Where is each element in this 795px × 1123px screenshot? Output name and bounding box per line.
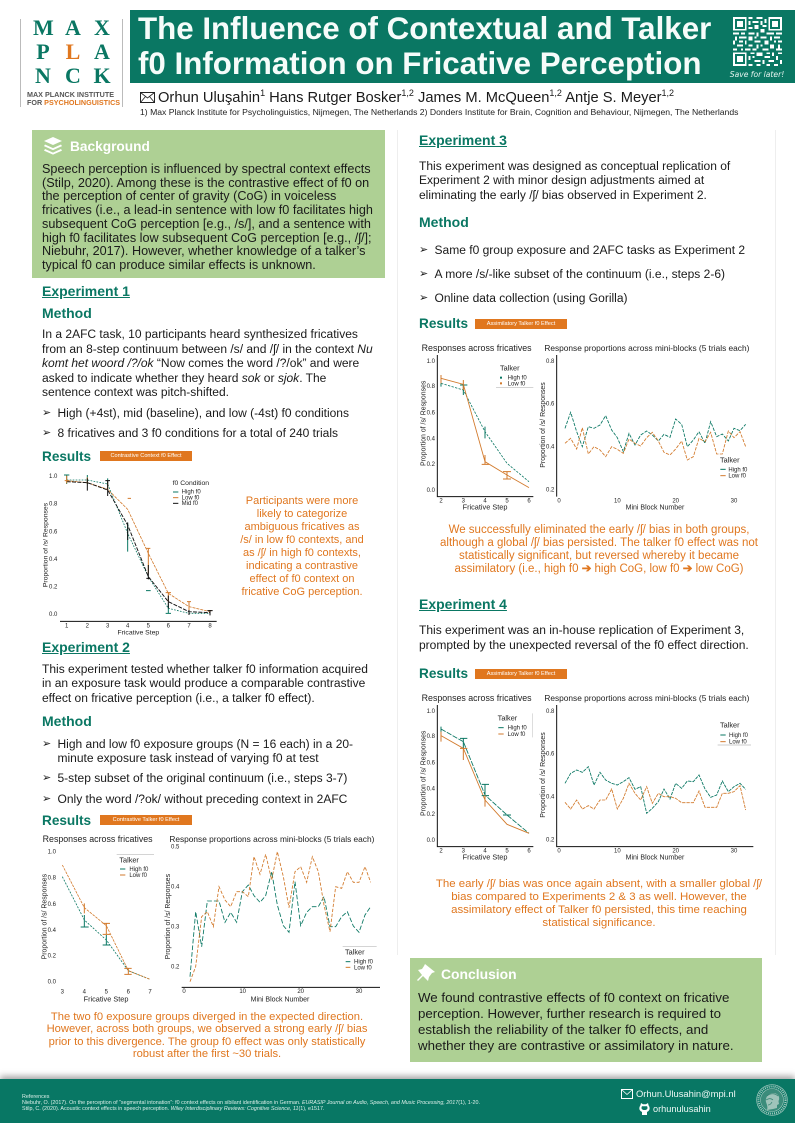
references: References xyxy=(22,1094,49,1100)
heading: results: Results xyxy=(42,813,91,828)
line charts: experiment 2: 7 xyxy=(148,990,152,996)
line charts: experiment 2: Responses across fricatives xyxy=(43,834,153,844)
line charts: experiment 4: 1.0 xyxy=(427,709,436,715)
line charts: experiment 2: Proportion of /s/ Responses xyxy=(42,873,49,959)
experiment 2 intro xyxy=(42,662,368,705)
line charts: experiment 2: 20 xyxy=(297,989,305,995)
results note: Participants were more xyxy=(246,494,358,506)
line charts: experiment 4: 0.4 xyxy=(546,795,555,801)
bullet list: High and low f0 exposure groups (N = 16 each) in a 20- xyxy=(58,736,353,750)
logo: Max Planck Institute for Psycholinguistics: C xyxy=(65,63,81,88)
line charts: experiment 4: High f0 xyxy=(508,726,527,732)
method text: In a 2AFC task, 10 participants heard synthesized fricatives xyxy=(42,327,358,341)
experiment 3 intro: eliminating the early /ʃ/ bias observed in Experiment 2. xyxy=(419,188,707,202)
line chart: experiment 1: 1 xyxy=(65,623,69,629)
conclusion text: perception. However, further research is required to xyxy=(418,1006,721,1021)
line charts: experiment 4: Response proportions across mini-blocks (5 trials each) xyxy=(544,693,750,703)
results note: statistically significant, but reversed whereby it became xyxy=(459,550,739,562)
line charts: experiment 4: 0.6 xyxy=(427,760,436,766)
line chart: experiment 1: 3 xyxy=(106,623,110,629)
results note: fricative CoG perception. xyxy=(241,586,363,598)
heading: method: Method xyxy=(42,713,92,729)
method text: from an 8-step continuum between /s/ and /ʃ/ in the context Nu xyxy=(42,342,373,356)
tag: contrastive talker f0 effect xyxy=(100,815,192,825)
line charts: experiment 2: 5 xyxy=(105,990,109,996)
conclusion text: whether they are contrastive or assimilatory in nature. xyxy=(418,1038,734,1053)
line charts: experiment 4: Fricative Step xyxy=(463,853,507,862)
logo: Max Planck Institute for Psycholinguistics: A xyxy=(65,15,81,40)
results note: ambiguous fricatives as xyxy=(245,520,359,532)
line charts: experiment 3: 0.2 xyxy=(427,462,436,468)
results note: /s/ in low f0 contexts, and xyxy=(240,534,364,546)
line charts: experiment 2: Mini Block Number xyxy=(251,996,310,1003)
heading: method: Method xyxy=(419,214,469,230)
experiment 3 intro: Experiment 2 with minor design adjustments aimed at xyxy=(419,173,704,187)
line charts: experiment 2: 0.4 xyxy=(48,928,57,934)
line charts: experiment 3: Proportion of /s/ Responses xyxy=(540,382,547,468)
line charts: experiment 3: 0.8 xyxy=(546,359,555,365)
line charts: experiment 2: 0.4 xyxy=(171,885,180,891)
line chart: experiment 1: 0.4 xyxy=(49,557,58,563)
save for later note: Save for later! xyxy=(730,70,784,79)
line charts: experiment 2 xyxy=(41,834,380,1003)
line charts: experiment 3: 5 xyxy=(505,499,509,505)
conclusion text: establish the reliability of the talker f0 effects, and xyxy=(418,1022,708,1037)
logo: Max Planck seal xyxy=(756,1084,788,1116)
line charts: experiment 3: 0.4 xyxy=(546,445,555,451)
line charts: experiment 2: 10 xyxy=(239,989,247,995)
line chart: experiment 1: 0.0 xyxy=(49,612,58,618)
line charts: experiment 3: 6 xyxy=(527,499,531,505)
contact github xyxy=(639,1103,711,1115)
bullet list xyxy=(42,406,349,440)
line charts: experiment 4: Proportion of /s/ Responses xyxy=(540,732,547,818)
line charts: experiment 2: 30 xyxy=(356,989,363,995)
background text: subsequent CoG perception [e.g., /s/], and a sentence with xyxy=(42,217,371,231)
experiment 3 intro: This experiment was designed as conceptual replication of xyxy=(419,159,730,173)
results note: as /ʃ/ in high f0 contexts, xyxy=(243,546,361,558)
heading: results: Results xyxy=(419,316,468,331)
line charts: experiment 4: High f0 xyxy=(729,733,749,739)
line charts: experiment 2: 0.2 xyxy=(48,954,57,960)
bullet list: ➢ xyxy=(419,267,428,280)
bullet list: ➢ xyxy=(42,792,51,805)
bullet list: Online data collection (using Gorilla) xyxy=(434,291,628,305)
line charts: experiment 2: 4 xyxy=(83,990,87,996)
references: Niebuhr, O. (2017). On the perception of “segmental intonation”: f0 context effects on sibilant identification in German. EURASIP Journal on Audio, Speech, and Music Processing, 2017(1), 1-20. xyxy=(22,1100,480,1106)
background text xyxy=(42,162,373,272)
results note: The two f0 exposure groups diverged in the expected direction. xyxy=(51,1010,363,1022)
heading: results: Results xyxy=(419,666,468,681)
line charts: experiment 3: 3 xyxy=(462,499,466,505)
logo: Max Planck Institute for Psycholinguistics xyxy=(20,19,123,107)
title xyxy=(138,11,711,81)
line charts: experiment 3: High f0 xyxy=(728,467,748,473)
title banner xyxy=(130,10,795,83)
line charts: experiment 2: 0.3 xyxy=(171,925,180,931)
references: Stilp, C. (2020). Acoustic context effects in speech perception. Wiley Interdisciplinary Reviews: Cognitive Science, 11(1), e1517. xyxy=(22,1106,324,1112)
method text: asked to indicate whether they heard sok or sjok. The xyxy=(42,371,326,385)
authors: Orhun Uluşahin1 Hans Rutger Bosker1,2 James M. McQueen1,2 Antje S. Meyer1,2 xyxy=(158,88,674,106)
line charts: experiment 4: 2 xyxy=(439,849,443,855)
line chart: experiment 1: 2 xyxy=(86,623,90,629)
line chart: experiment 1: 7 xyxy=(187,623,191,629)
line chart: experiment 1: 0.2 xyxy=(49,585,58,591)
logo: Max Planck Institute for Psycholinguistics: L xyxy=(66,39,80,64)
panel: background xyxy=(32,130,385,278)
logo: Max Planck Institute for Psycholinguistics: M xyxy=(33,15,54,40)
bullet list: A more /s/-like subset of the continuum (i.e., steps 2-6) xyxy=(434,267,725,281)
panel: experiment 2 xyxy=(41,639,380,1060)
line charts: experiment 3: Fricative Step xyxy=(463,503,507,512)
line chart: experiment 1: 4 xyxy=(126,623,130,629)
line charts: experiment 4: 5 xyxy=(505,849,509,855)
bullet list: ➢ xyxy=(42,406,51,418)
line charts: experiment 3: 0.8 xyxy=(427,384,436,390)
line charts: experiment 4: Low f0 xyxy=(508,732,526,738)
bullet list xyxy=(419,243,745,305)
tag: contrastive context f0 effect xyxy=(100,451,192,461)
background text: Speech perception is influenced by spectral context effects xyxy=(42,162,371,176)
line chart: experiment 1: Proportion of /s/ Responses xyxy=(42,502,49,587)
line charts: experiment 3: 4 xyxy=(483,499,487,505)
line charts: experiment 3: 1.0 xyxy=(427,359,436,365)
heading: experiment 1: Experiment 1 xyxy=(42,283,130,299)
line charts: experiment 3: Response proportions across mini-blocks (5 trials each) xyxy=(544,343,750,353)
line charts: experiment 2: Proportion of /s/ Responses xyxy=(165,873,172,959)
background text: Niebuhr, 2017). However, whether knowledge of a talker’s xyxy=(42,244,365,258)
line charts: experiment 4: 6 xyxy=(527,849,531,855)
line chart: experiment 1: Fricative Step xyxy=(117,630,159,637)
heading: background: Background xyxy=(70,139,150,154)
line charts: experiment 3 xyxy=(420,343,750,512)
line charts: experiment 3: 0.6 xyxy=(427,410,436,416)
background text: the perception of center of gravity (CoG) in voiceless xyxy=(42,189,336,203)
line charts: experiment 4: 0.4 xyxy=(427,786,436,792)
line charts: experiment 4: 0.8 xyxy=(546,709,555,715)
contact email: Orhun.Ulusahin@mpi.nl xyxy=(636,1088,736,1099)
experiment 2 intro: in an exposure task would produce a comparable contrastive xyxy=(42,676,365,690)
bullet list: ➢ xyxy=(42,736,51,750)
background text: high f0 facilitates low subsequent CoG perception [e.g., /ʃ/]; xyxy=(42,231,372,245)
line charts: experiment 2: 0.5 xyxy=(171,845,180,851)
tag: assimilatory talker f0 effect xyxy=(475,319,567,329)
line charts: experiment 4: Mini Block Number xyxy=(626,855,685,862)
line charts: experiment 3: 0 xyxy=(557,499,561,505)
icon: pin xyxy=(417,964,435,981)
background text: typical f0 can produce similar effects is unknown. xyxy=(42,258,316,272)
affiliations: 1) Max Planck Institute for Psycholinguistics, Nijmegen, The Netherlands 2) Donders Institute for Brain, Cognition and Behaviour, Nijmegen, The Netherlands xyxy=(140,107,738,117)
line charts: experiment 4 xyxy=(420,693,754,862)
line chart: experiment 1: 5 xyxy=(147,623,151,629)
heading: method: Method xyxy=(42,305,92,321)
line charts: experiment 3: High f0 xyxy=(508,376,527,382)
line charts: experiment 3: 10 xyxy=(614,499,621,505)
results note xyxy=(240,494,364,598)
line charts: experiment 2: Low f0 xyxy=(129,873,148,879)
bullet list: ➢ xyxy=(42,426,51,438)
line charts: experiment 4: Low f0 xyxy=(729,740,747,746)
line charts: experiment 4: 4 xyxy=(483,849,487,855)
line charts: experiment 4: Responses across fricatives xyxy=(422,693,532,703)
tag: contrastive talker f0 effect: Contrastive Talker f0 Effect xyxy=(113,817,179,823)
line charts: experiment 3: 20 xyxy=(672,499,680,505)
line charts: experiment 2: High f0 xyxy=(129,867,149,873)
line charts: experiment 4: 0.6 xyxy=(546,751,555,757)
line charts: experiment 2: Response proportions across mini-blocks (5 trials each) xyxy=(169,834,375,844)
logo: Max Planck Institute for Psycholinguistics: X xyxy=(94,15,110,40)
line chart: experiment 1: 6 xyxy=(167,623,171,629)
bullet list: 8 fricatives and 3 f0 conditions for a total of 240 trials xyxy=(58,426,338,440)
experiment 4 intro xyxy=(419,623,749,652)
logo: Max Planck Institute for Psycholinguistics: K xyxy=(93,63,111,88)
results note: We successfully eliminated the early /ʃ/ bias in both groups, xyxy=(449,524,749,536)
line charts: experiment 2: 0.2 xyxy=(171,965,180,971)
line chart: experiment 1: 8 xyxy=(208,623,212,629)
line charts: experiment 3: 2 xyxy=(439,499,443,505)
line charts: experiment 4: 3 xyxy=(462,849,466,855)
line charts: experiment 2: 6 xyxy=(127,990,131,996)
line charts: experiment 4: Talker xyxy=(498,714,518,723)
line charts: experiment 2: 0.0 xyxy=(48,980,57,986)
results note: bias compared to Experiments 2 & 3 as well. However, the xyxy=(451,890,747,902)
logo: Max Planck Institute for Psycholinguistics: A xyxy=(94,39,110,64)
QR code xyxy=(733,17,782,66)
line charts: experiment 3: 30 xyxy=(731,499,738,505)
experiment 4 intro: prompted by the unexpected reversal of the f0 effect direction. xyxy=(419,638,749,652)
results note: The early /ʃ/ bias was once again absent, with a smaller global /ʃ/ xyxy=(436,878,762,890)
panel: conclusion xyxy=(410,958,762,1062)
heading: conclusion: Conclusion xyxy=(441,966,517,982)
experiment 2 intro: effect on fricative perception (i.e., a talker f0 effect). xyxy=(42,691,315,705)
bullet list: minute exposure task instead of varying f0 at test xyxy=(58,751,319,765)
line chart: experiment 1: 0.8 xyxy=(49,502,58,508)
conclusion text: We found contrastive effects of f0 context on fricative xyxy=(418,990,729,1005)
line charts: experiment 4: 0.2 xyxy=(427,812,436,818)
results note: indicating a contrastive xyxy=(246,560,358,572)
line charts: experiment 2: Talker xyxy=(119,855,139,864)
panel: experiment 1 xyxy=(42,283,373,637)
contact github: orhunulusahin xyxy=(653,1104,711,1114)
results note: although a global /ʃ/ bias persisted. The talker f0 effect was not xyxy=(440,537,758,549)
line charts: experiment 3: 0.6 xyxy=(546,401,555,407)
results note: likely to categorize xyxy=(257,508,347,520)
title: f0 Information on Fricative Perception xyxy=(138,46,701,81)
line charts: experiment 3: 0.0 xyxy=(427,488,436,494)
line charts: experiment 2: Fricative Step xyxy=(84,994,128,1003)
logo: Max Planck Institute for Psycholinguistics: FOR PSYCHOLINGUISTICS xyxy=(27,98,120,107)
bullet list: 5-step subset of the original continuum (i.e., steps 3-7) xyxy=(58,771,347,785)
line charts: experiment 4: 0 xyxy=(557,849,561,855)
bullet list xyxy=(42,736,353,806)
results note: assimilatory (i.e., high f0 ➔ high CoG, low f0 ➔ low CoG) xyxy=(454,563,744,575)
bullet list: High (+4st), mid (baseline), and low (-4st) f0 conditions xyxy=(58,406,349,420)
logo: Max Planck Institute for Psycholinguistics: P xyxy=(36,39,50,64)
line chart: experiment 1: f0 Condition xyxy=(173,480,209,487)
tag: assimilatory talker f0 effect: Assimilatory Talker f0 Effect xyxy=(487,321,555,327)
background text: fricatives (i.e., a lead-in sentence with low f0 facilitates high xyxy=(42,203,373,217)
logo: Max Planck Institute for Psycholinguistics: MAX PLANCK INSTITUTE xyxy=(27,90,114,99)
conclusion text xyxy=(418,990,734,1053)
line charts: experiment 3: Mini Block Number xyxy=(626,505,685,512)
line charts: experiment 2: 3 xyxy=(61,990,65,996)
line charts: experiment 4: 30 xyxy=(731,849,738,855)
heading: experiment 4: Experiment 4 xyxy=(419,596,507,612)
bullet list: ➢ xyxy=(42,771,51,784)
line charts: experiment 3: Talker xyxy=(720,455,740,464)
bullet list: Same f0 group exposure and 2AFC tasks as Experiment 2 xyxy=(434,243,745,257)
experiment 3 intro xyxy=(419,159,730,202)
method text: komt het woord /?/ok “Now comes the word /?/ok” and were xyxy=(42,356,359,370)
line charts: experiment 2: 1.0 xyxy=(48,850,57,856)
line charts: experiment 4: 0.0 xyxy=(427,838,436,844)
line chart: experiment 1: 0.6 xyxy=(49,529,58,535)
column guide lines xyxy=(397,130,398,955)
results note: effect of f0 context on xyxy=(250,572,354,584)
results note xyxy=(47,1010,368,1060)
tag: contrastive context f0 effect: Contrastive Context f0 Effect xyxy=(110,453,182,459)
footer xyxy=(0,1079,795,1123)
icon: envelope xyxy=(140,92,155,103)
icon: layers xyxy=(44,137,62,154)
tag: assimilatory talker f0 effect: Assimilatory Talker f0 Effect xyxy=(487,671,555,677)
line chart: experiment 1 xyxy=(42,474,217,637)
method text xyxy=(42,327,373,399)
experiment 2 intro: This experiment tested whether talker f0 information acquired xyxy=(42,662,368,676)
bullet list: ➢ xyxy=(419,291,428,304)
tag: assimilatory talker f0 effect xyxy=(475,669,567,679)
results note: However, across both groups, we observed a strong early /ʃ/ bias xyxy=(47,1023,367,1035)
line charts: experiment 4: 0.8 xyxy=(427,734,436,740)
method text: sentence context was pitch-shifted. xyxy=(42,385,229,399)
line chart: experiment 1: High f0 xyxy=(182,490,201,496)
line charts: experiment 3: 0.2 xyxy=(546,487,555,493)
heading: experiment 3: Experiment 3 xyxy=(419,132,507,148)
line charts: experiment 4: Talker xyxy=(720,721,740,730)
line charts: experiment 4: 0.2 xyxy=(546,837,555,843)
line charts: experiment 4: 10 xyxy=(614,849,621,855)
panel: experiment 4 xyxy=(419,596,762,928)
line charts: experiment 4: 20 xyxy=(672,849,680,855)
line charts: experiment 2: 0.8 xyxy=(48,875,57,881)
panel: experiment 3 xyxy=(419,132,758,575)
title: The Influence of Contextual and Talker xyxy=(138,11,711,46)
line charts: experiment 2: 0.6 xyxy=(48,902,57,908)
results note xyxy=(436,878,762,928)
bullet list: ➢ xyxy=(419,243,428,256)
line charts: experiment 3: Proportion of /s/ Responses xyxy=(421,380,428,466)
line charts: experiment 3: 0.4 xyxy=(427,436,436,442)
results note xyxy=(440,524,758,575)
results note: statistical significance. xyxy=(542,916,656,928)
line charts: experiment 3: Low f0 xyxy=(508,381,526,387)
bullet list: Only the word /?ok/ without preceding context in 2AFC xyxy=(58,792,347,806)
background text: (Stilp, 2020). Among these is the contrastive effect of f0 on xyxy=(42,176,369,190)
line chart: experiment 1: 1.0 xyxy=(49,474,58,480)
line charts: experiment 3: Responses across fricatives xyxy=(422,343,532,353)
results note: assimilatory effect of Talker f0 persisted, this time reaching xyxy=(451,904,747,916)
line charts: experiment 2: High f0 xyxy=(354,960,374,966)
line charts: experiment 3: Low f0 xyxy=(728,474,747,480)
line charts: experiment 2: Low f0 xyxy=(354,965,372,971)
logo: Max Planck Institute for Psycholinguistics: N xyxy=(35,63,51,88)
line charts: experiment 3: Talker xyxy=(500,364,520,373)
results note: prior to this divergence. The group f0 effect was only statistically xyxy=(49,1036,365,1048)
references xyxy=(22,1094,480,1112)
line chart: experiment 1: Low f0 xyxy=(182,495,200,501)
results note: robust after the first ~30 trials. xyxy=(133,1048,281,1060)
line charts: experiment 2: Talker xyxy=(345,947,365,956)
heading: experiment 2: Experiment 2 xyxy=(42,639,130,655)
line charts: experiment 4: Proportion of /s/ Responses xyxy=(421,730,428,816)
heading: results: Results xyxy=(42,449,91,464)
line charts: experiment 2: 0 xyxy=(182,989,186,995)
experiment 4 intro: This experiment was an in-house replication of Experiment 3, xyxy=(419,623,744,637)
line chart: experiment 1: Mid f0 xyxy=(182,501,199,507)
